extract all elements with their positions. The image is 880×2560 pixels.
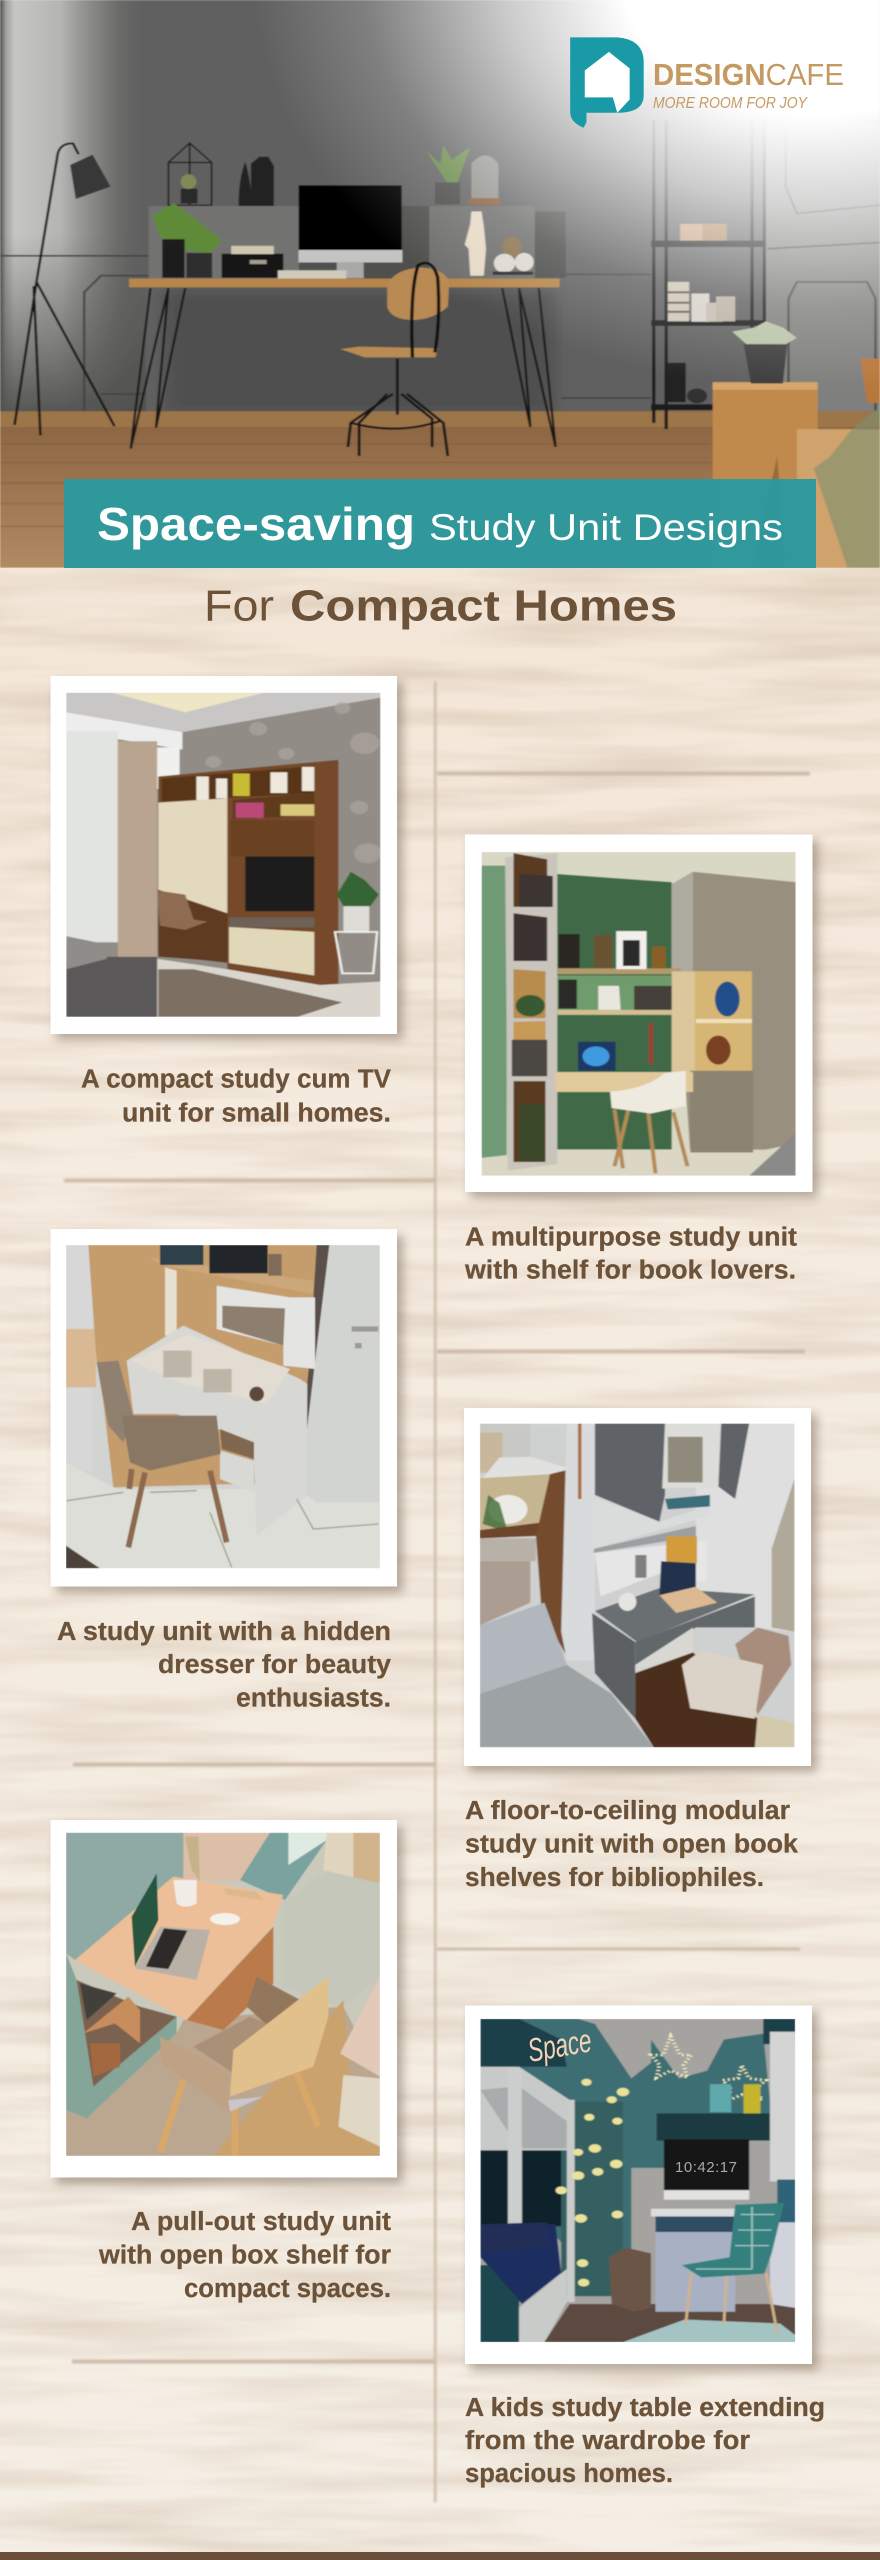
- centre and row dividers: [64, 681, 810, 2502]
- subtitle: For: [204, 582, 274, 630]
- caption 4: study unit with open book: [465, 1830, 799, 1858]
- desk top: [129, 279, 560, 287]
- caption 2: with shelf for book lovers.: [464, 1256, 796, 1284]
- photo 4: [480, 1424, 795, 1747]
- plant and glass dome: [427, 145, 470, 182]
- photo 1: [66, 693, 381, 1017]
- photo 6: [480, 2019, 795, 2342]
- caption 5: A pull-out study unit: [131, 2208, 392, 2236]
- caption 2: A multipurpose study unit: [465, 1224, 798, 1252]
- hairpin desk legs: [131, 288, 556, 449]
- card 1: study cum TV unit: [50, 676, 403, 1128]
- caption 6: A kids study table extending: [465, 2394, 825, 2422]
- caption 3: A study unit with a hidden: [57, 1618, 391, 1646]
- caption 6: spacious homes.: [465, 2460, 673, 2488]
- card 3: hidden dresser: [50, 1229, 403, 1712]
- header photo: study desk in grey room: [0, 0, 880, 568]
- clock on screen: 10:42:17: [675, 2159, 737, 2176]
- wooden stools, cabinet and plants: [711, 382, 818, 479]
- wooden chair: [341, 263, 449, 456]
- photo 3: [66, 1245, 380, 1568]
- wall mouldings: [0, 162, 880, 412]
- white fade: [284, 0, 880, 371]
- card 5: pull-out study unit: [50, 1820, 403, 2303]
- photo 2: [482, 852, 796, 1176]
- floor lamp: [15, 143, 114, 435]
- footer strip: [0, 2552, 880, 2560]
- caption 5: compact spaces.: [184, 2275, 391, 2303]
- photo 5: [66, 1833, 380, 2156]
- title line one: Space-saving: [97, 498, 415, 550]
- vases: [239, 157, 274, 206]
- artist figure and stones: [465, 211, 486, 276]
- shelving rack: [651, 120, 766, 429]
- caption 1: A compact study cum TV: [81, 1066, 391, 1094]
- desk back boxes: [149, 206, 299, 279]
- caption 3: dresser for beauty: [158, 1651, 392, 1679]
- caption 5: with open box shelf for: [98, 2242, 391, 2270]
- left potted plants: [153, 203, 222, 254]
- caption 4: shelves for bibliophiles.: [465, 1864, 764, 1892]
- neon sign: Space: [525, 2021, 594, 2069]
- logo: Design Cafe: [570, 37, 844, 128]
- caption 6: from the wardrobe for: [465, 2427, 750, 2455]
- card 4: floor-to-ceiling unit: [464, 1408, 817, 1892]
- caption 1: unit for small homes.: [122, 1100, 391, 1128]
- subtitle: Compact Homes: [290, 582, 677, 630]
- monitor: [299, 185, 402, 251]
- logo tagline: MORE ROOM FOR JOY: [653, 95, 808, 112]
- title line one: Study Unit Designs: [429, 507, 783, 548]
- baseboard and floor: [0, 411, 880, 427]
- caption 4: A floor-to-ceiling modular: [465, 1797, 790, 1825]
- logo wordmark: DESIGNCAFE: [653, 57, 844, 92]
- logo mark: [570, 37, 644, 128]
- terrarium: [168, 143, 212, 205]
- card 2: multipurpose study unit: [464, 834, 818, 1284]
- wood plank background: [0, 560, 880, 2560]
- caption 3: enthusiasts.: [236, 1684, 391, 1712]
- card 6: kids study table: [465, 2006, 825, 2488]
- title banner: [64, 479, 816, 568]
